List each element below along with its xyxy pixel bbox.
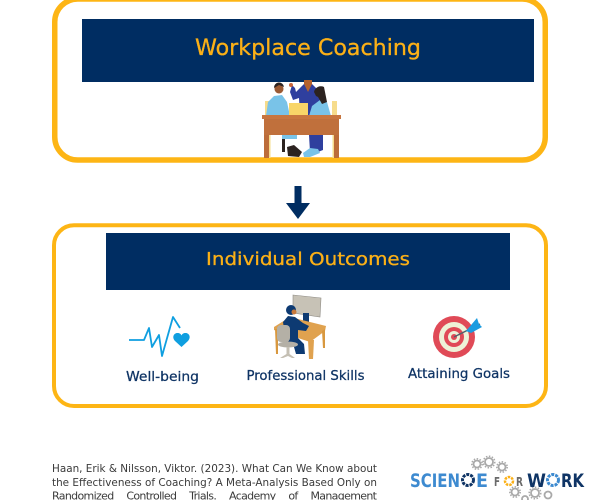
- heading: workplace coaching: Workplace Coaching: [195, 36, 421, 61]
- logo: science for work: SCIEN: [410, 470, 460, 492]
- icon: target with arrow: [433, 316, 482, 358]
- logo: science for work: E: [476, 470, 488, 492]
- icon: coaching team at desk: [262, 80, 341, 158]
- heading: individual outcomes: Individual Outcomes: [206, 249, 410, 270]
- label: well-being: Well-being: [126, 370, 199, 385]
- logo: science for work: F: [494, 475, 500, 489]
- label: attaining goals: Attaining Goals: [408, 367, 510, 382]
- heading: workplace coaching: [82, 19, 534, 82]
- logo gears: [472, 456, 552, 500]
- logo: science for work: [410, 456, 585, 500]
- heading: individual outcomes: [106, 233, 510, 290]
- panel: individual outcomes: [54, 225, 546, 406]
- citation text: Haan, Erik & Nilsson, Viktor. (2023). What Can We Know about: [52, 462, 378, 475]
- citation text: the Effectiveness of Coaching? A Meta-Analysis Based Only on: [52, 476, 377, 489]
- icon: professional at computer: [274, 295, 326, 359]
- logo: science for work: W: [527, 470, 546, 492]
- icon: well-being heartbeat: [129, 317, 190, 356]
- label: professional skills: Professional Skills: [246, 369, 365, 384]
- logo: science for work: RK: [561, 470, 585, 492]
- citation text: [52, 462, 378, 500]
- logo: science for work: R: [516, 475, 523, 489]
- panel: workplace coaching: [55, 0, 545, 160]
- arrow: down to outcomes: [286, 186, 310, 219]
